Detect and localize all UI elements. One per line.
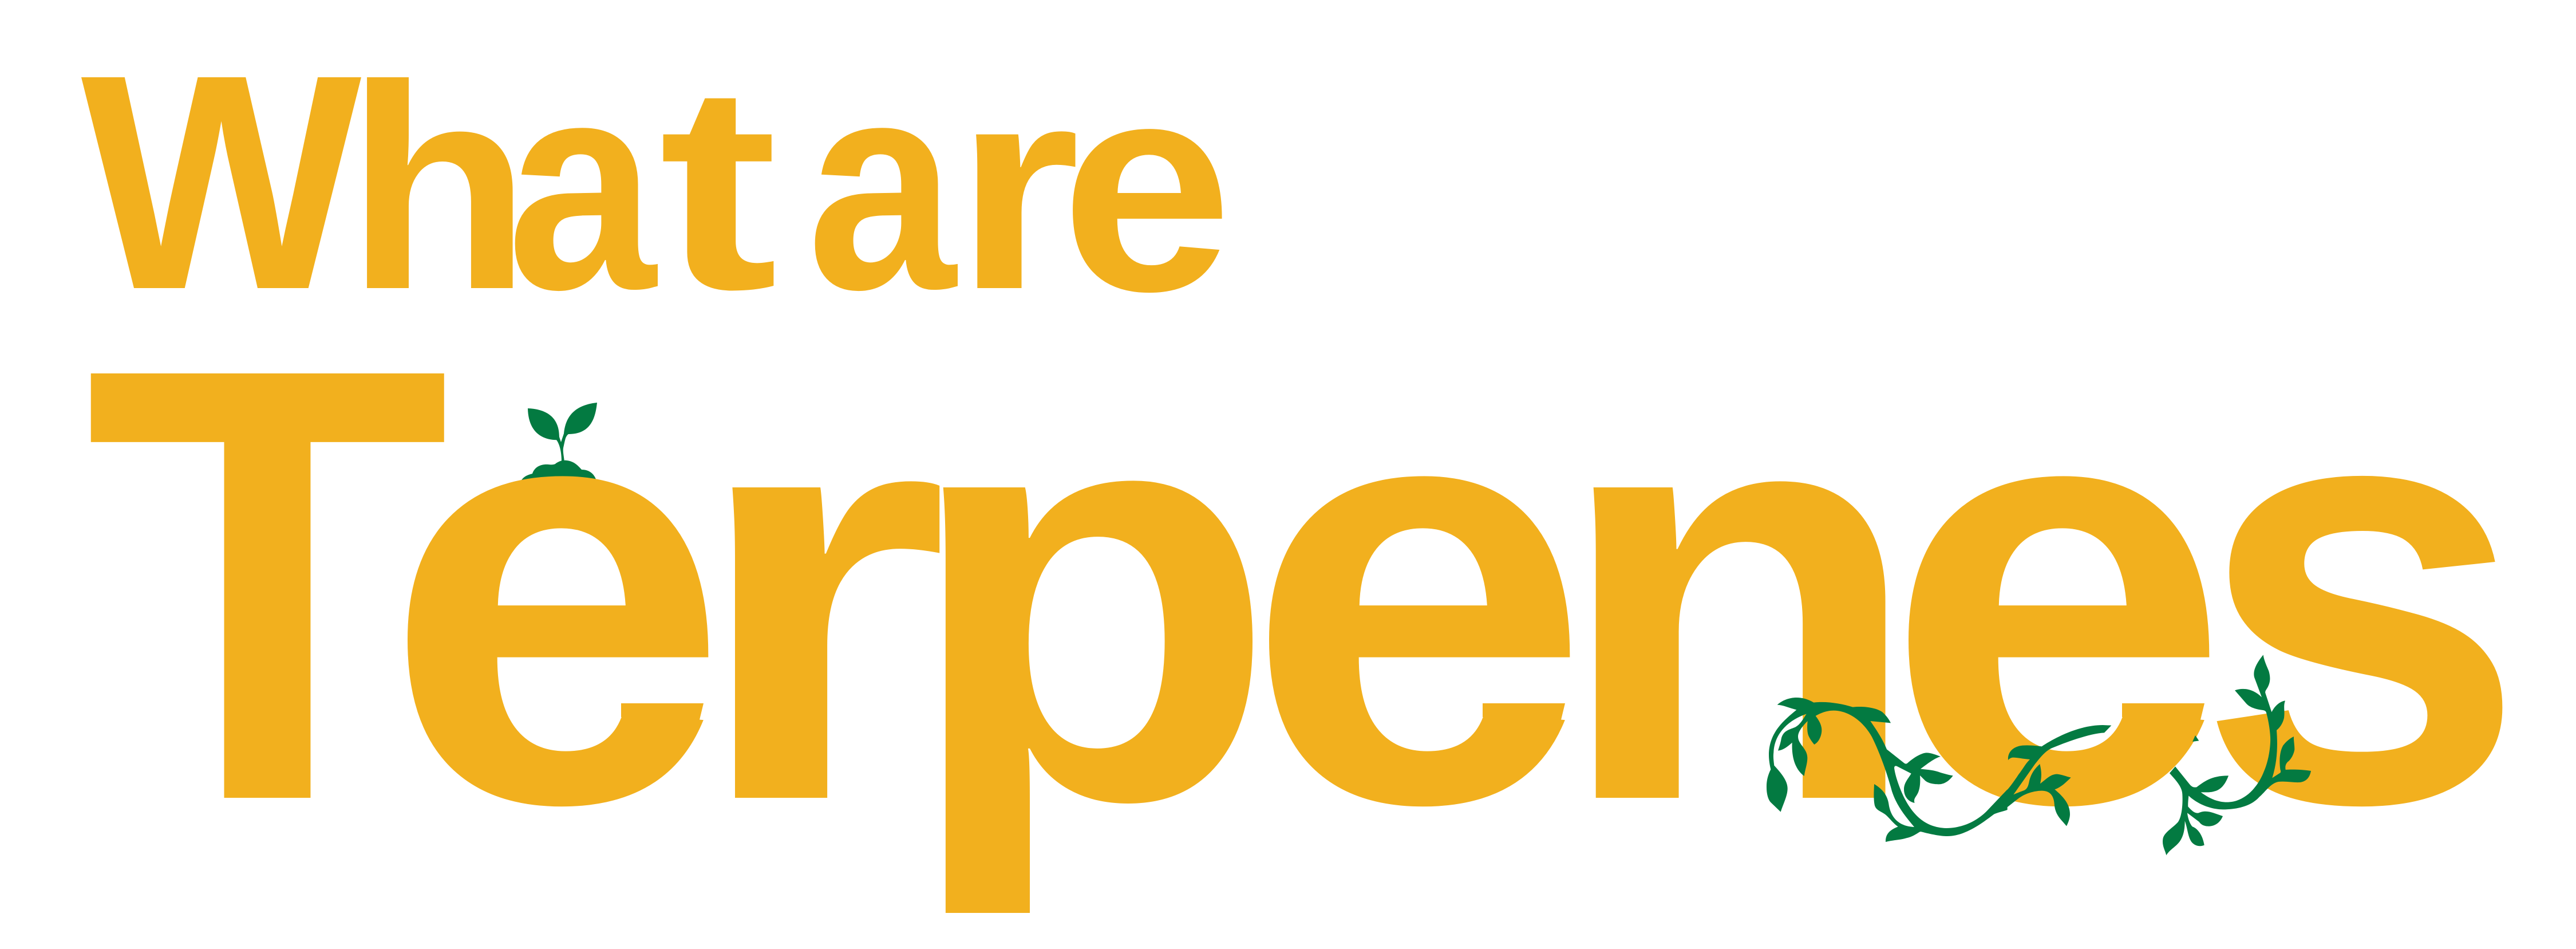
heading: What are: e (1061, 19, 1232, 353)
heading: What are: a (507, 19, 658, 352)
heading: What are: t (659, 25, 778, 350)
heading: Terpenes: n (1554, 266, 1923, 923)
heading: Terpenes: T (84, 240, 451, 929)
icon: left vine over n and e (1767, 698, 2111, 842)
heading: What are: h (346, 25, 531, 350)
heading: What are: r (955, 25, 1080, 350)
icon: right vine over e and s (2163, 655, 2311, 855)
heading: Terpenes: r (688, 266, 950, 923)
heading: Terpenes: s (2196, 255, 2527, 929)
heading: Terpenes: e (1244, 255, 1591, 929)
heading: Terpenes: p (903, 266, 1278, 926)
heading: What are: W (81, 11, 364, 353)
heading: Terpenes: e (1884, 255, 2230, 929)
heading: What are: a (807, 19, 958, 352)
icon: seedling on the first e (519, 403, 598, 487)
heading: Terpenes: e (384, 255, 729, 929)
